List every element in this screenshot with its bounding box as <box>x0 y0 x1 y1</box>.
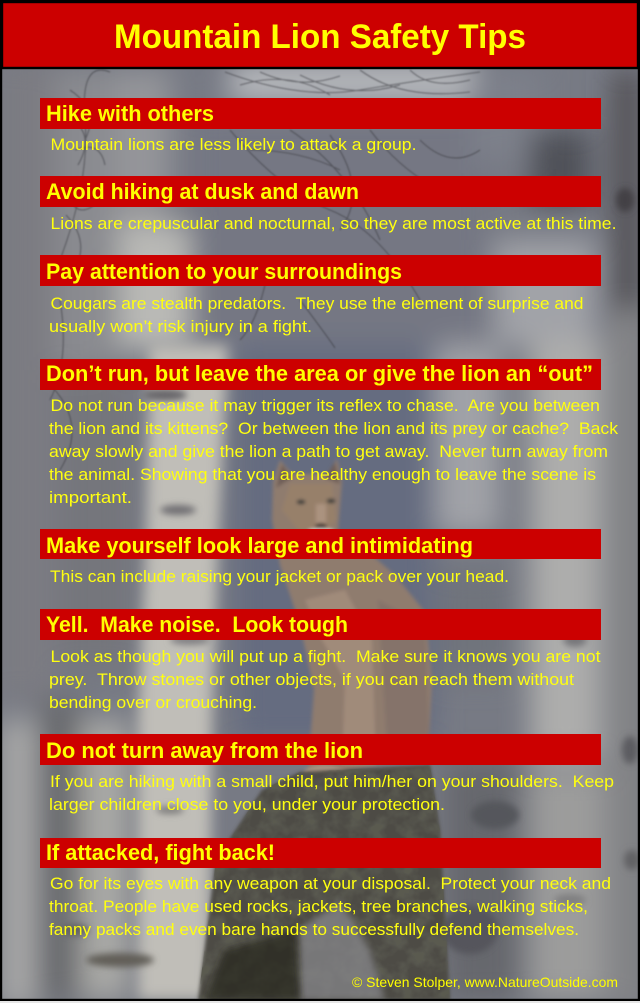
panel: pay attention: usually won’t risk injury in a fight. <box>49 317 312 336</box>
title banner <box>2 2 638 68</box>
panel: yell <box>40 609 601 712</box>
panel: fight back: If attacked, fight back! <box>46 840 275 865</box>
panel: look large: Make yourself look large and intimidating <box>46 533 473 558</box>
panel: do not turn away: larger children close to you, under your protection. <box>49 795 445 814</box>
panel: yell: Look as though you will put up a fight. Make sure it knows you are not <box>50 647 601 666</box>
panel: hike with others: Hike with others <box>46 101 214 126</box>
panel: look large: This can include raising your jacket or pack over your head. <box>50 567 509 586</box>
panel: pay attention: Pay attention to your surroundings <box>46 259 402 284</box>
panel: pay attention <box>40 255 601 336</box>
panel: fight back: fanny packs and even bare hands to successfully defend themselves. <box>49 920 579 939</box>
panel: don't run: Don’t run, but leave the area or give the lion an “out” <box>46 361 593 386</box>
panel: pay attention: Cougars are stealth predators. They use the element of surprise and <box>50 294 584 313</box>
panel: look large <box>40 529 601 586</box>
forest branches <box>45 70 480 470</box>
panel: yell: prey. Throw stones or other objects, if you can reach them without <box>49 670 574 689</box>
rock <box>198 765 450 1000</box>
panel: yell: Yell. Make noise. Look tough <box>46 612 348 637</box>
panel: fight back <box>40 838 611 939</box>
title: Mountain Lion Safety Tips <box>114 18 526 56</box>
panel: don't run: away slowly and give the lion a path to get away. Never turn away from <box>49 442 608 461</box>
panel: hike with others: Mountain lions are less likely to attack a group. <box>50 135 416 154</box>
panel: avoid dusk and dawn: Avoid hiking at dusk and dawn <box>46 179 359 204</box>
lion <box>272 458 432 780</box>
panel: don't run: the lion and its kittens? Or between the lion and its prey or cache? Back <box>49 419 619 438</box>
panel: avoid dusk and dawn: Lions are crepuscular and nocturnal, so they are most active at this time. <box>50 214 617 233</box>
panel: don't run <box>40 359 619 507</box>
panel: fight back: throat. People have used rocks, jackets, tree branches, walking sticks, <box>49 897 588 916</box>
panel: avoid dusk and dawn <box>40 176 617 233</box>
credit: © Steven Stolper, www.NatureOutside.com <box>352 974 618 990</box>
panel: don't run: important. <box>49 488 132 507</box>
panel: fight back: Go for its eyes with any weapon at your disposal. Protect your neck and <box>50 874 611 893</box>
panel: do not turn away: If you are hiking with a small child, put him/her on your shoulders. Keep <box>50 772 614 791</box>
panel: don't run: Do not run because it may trigger its reflex to chase. Are you between <box>50 396 600 415</box>
panel: yell: bending over or crouching. <box>49 693 257 712</box>
panel: do not turn away: Do not turn away from the lion <box>46 738 363 763</box>
panel: do not turn away <box>40 734 614 814</box>
panel: don't run: the animal. Showing that you are healthy enough to leave the scene is <box>49 465 596 484</box>
panel: hike with others <box>40 98 601 154</box>
